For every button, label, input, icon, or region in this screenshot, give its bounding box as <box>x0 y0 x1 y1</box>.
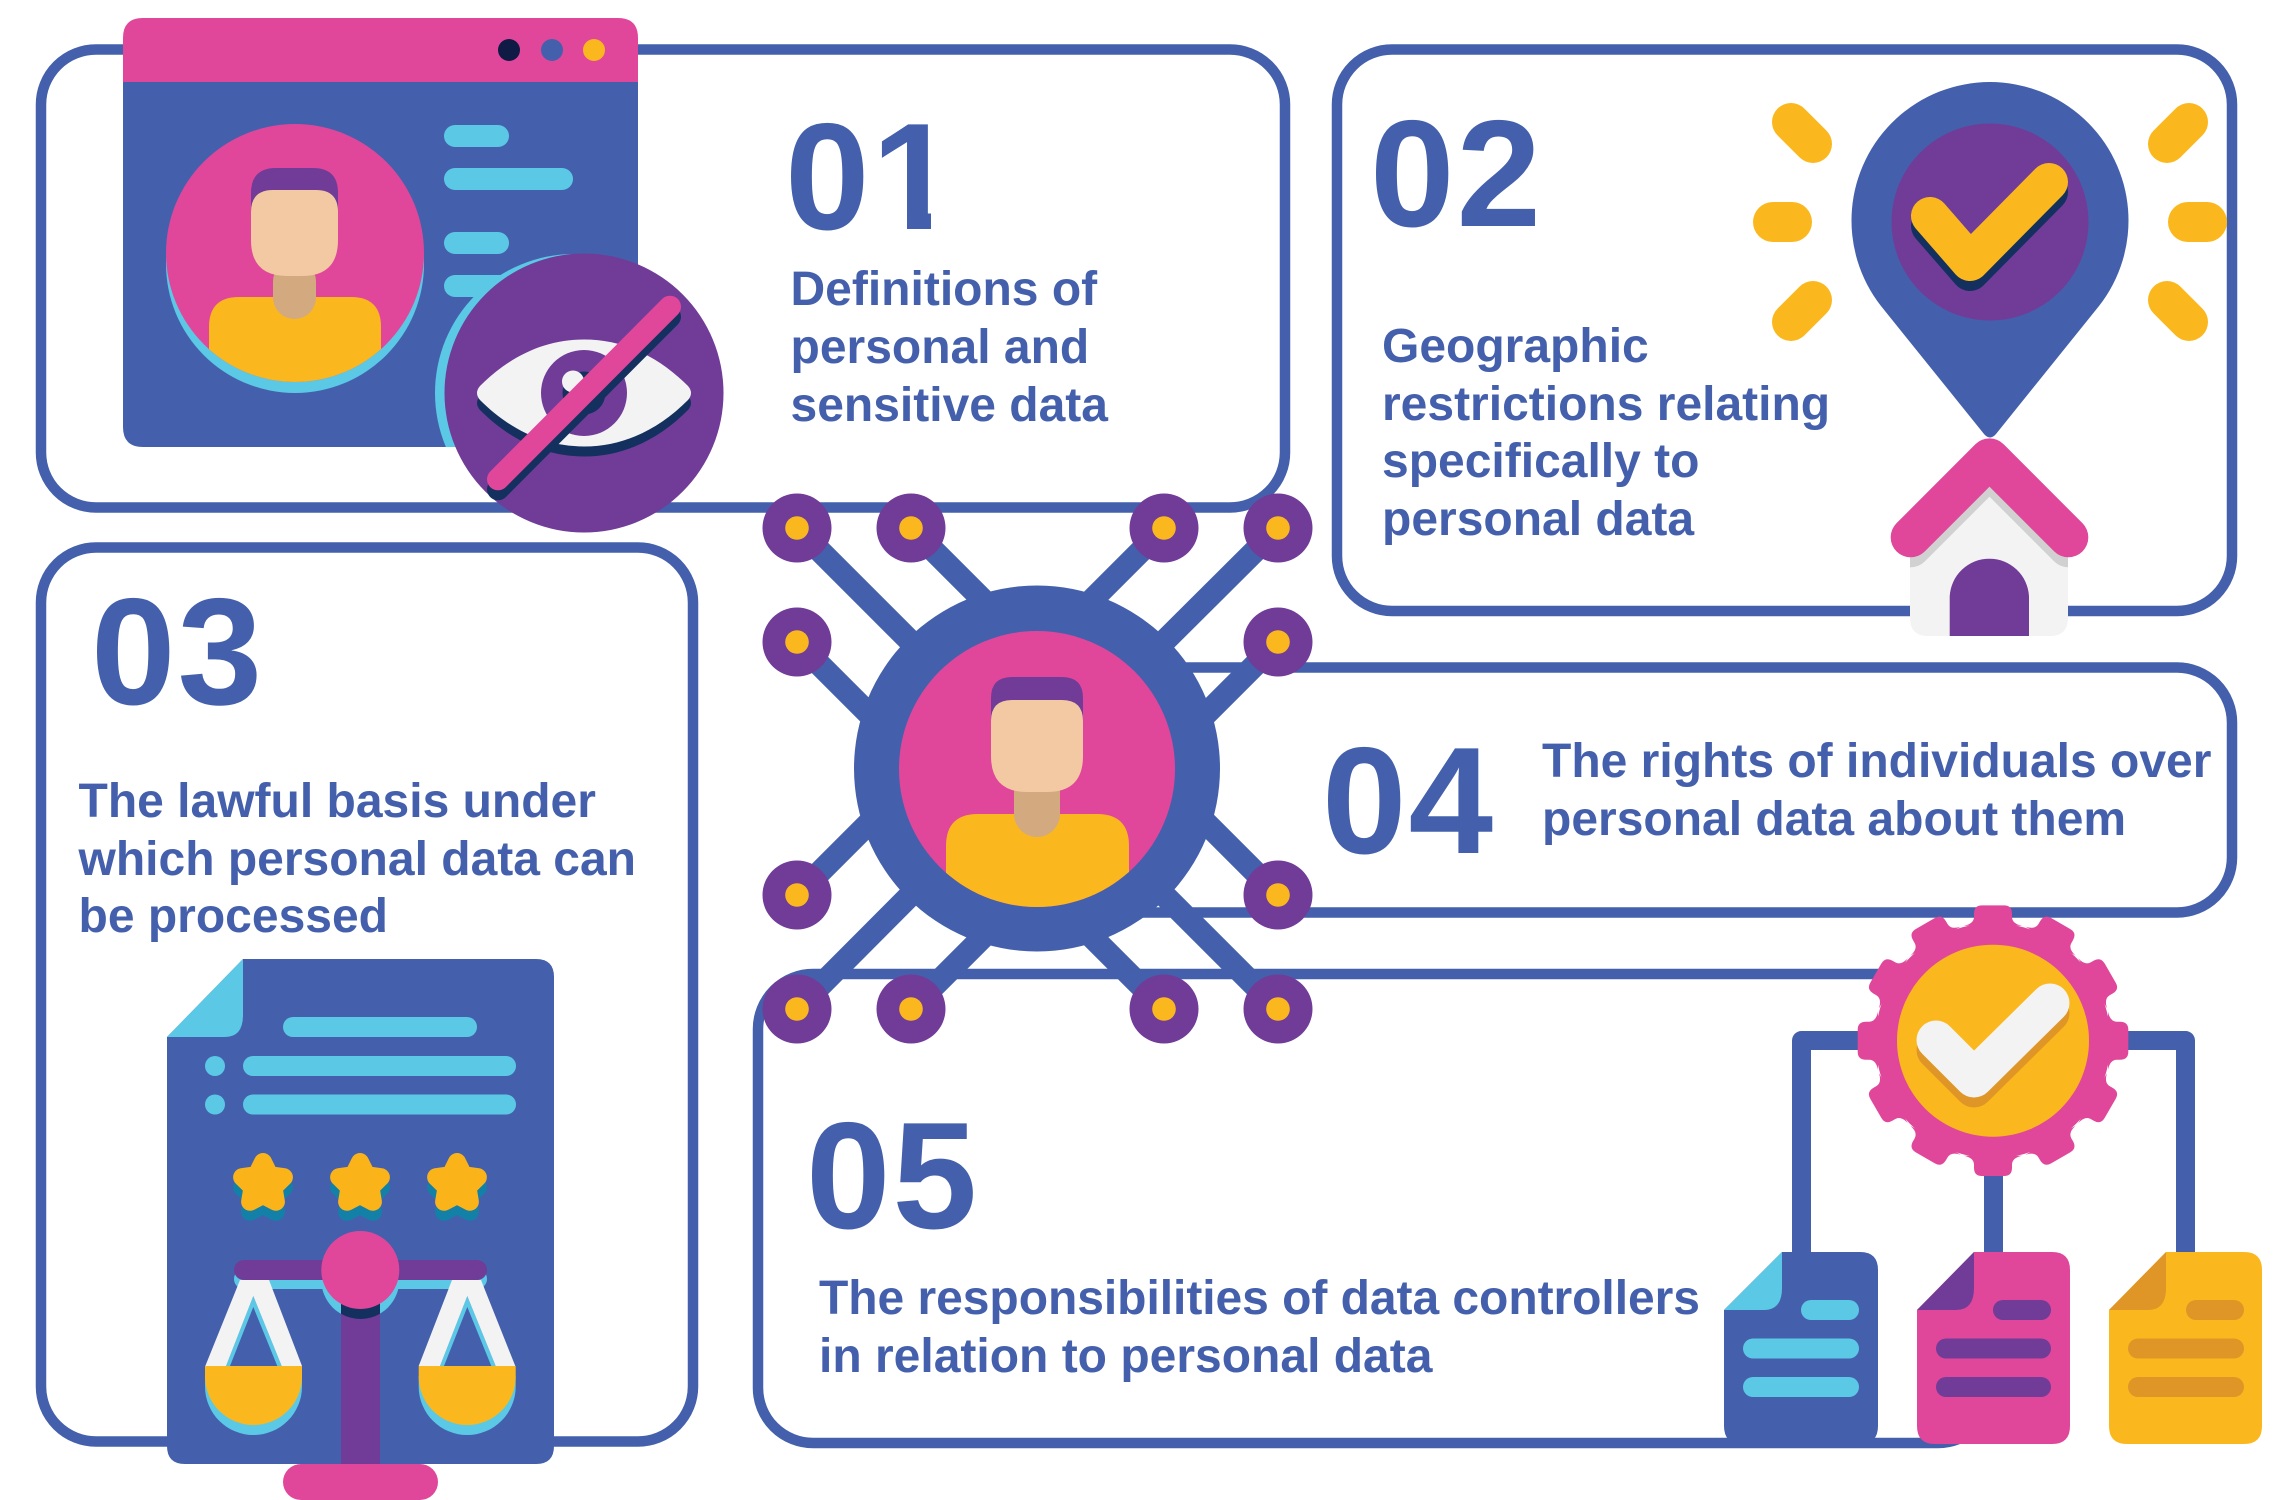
hub connectors <box>797 528 1278 1009</box>
hub disc <box>854 586 1220 952</box>
number 04: 04 <box>1322 716 1495 886</box>
document fold <box>167 959 243 1037</box>
icon: blue document <box>1724 1252 1878 1444</box>
icon: document with scales <box>167 959 554 1500</box>
panel 5 border <box>758 974 1993 1443</box>
panel 4 border <box>1100 668 2232 912</box>
text: panel 2: personal data <box>1382 493 1694 546</box>
number 05: 05 <box>806 1091 979 1261</box>
window body <box>123 82 638 447</box>
icon: house <box>1910 458 2068 636</box>
icon: gear with check <box>1858 905 2128 1176</box>
icon: browser window with profile <box>123 18 638 447</box>
central network hub <box>762 494 1312 1044</box>
text: panel 3: which personal data can <box>78 833 636 886</box>
text: panel 5: in relation to personal data <box>819 1330 1433 1383</box>
number 02: 02 <box>1370 89 1543 259</box>
panel 2 border <box>1337 50 2232 611</box>
icon: crossed-out eye <box>435 254 724 532</box>
profile avatar <box>166 124 424 400</box>
text: panel 2: restrictions relating <box>1382 378 1830 431</box>
text: panel 4 <box>1542 735 2211 846</box>
rating stars <box>242 1162 478 1212</box>
text: panel 1: sensitive data <box>790 379 1108 432</box>
icon: map pin with check <box>1851 82 2128 438</box>
panel 3 border <box>41 548 693 1442</box>
text: panel 3: The lawful basis under <box>78 775 596 828</box>
profile text lines <box>444 125 573 297</box>
text: panel 4: personal data about them <box>1542 793 2126 846</box>
icon: yellow document <box>2109 1252 2262 1444</box>
hub nodes <box>762 494 1312 1044</box>
panel 1 border <box>41 50 1285 508</box>
text: panel 5: The responsibilities of data controllers <box>819 1272 1700 1325</box>
text: panel 2: specifically to <box>1382 435 1699 488</box>
scales <box>205 1231 516 1500</box>
document connectors <box>1802 1040 2186 1260</box>
icon: rays around map pin <box>1773 122 2207 322</box>
document lines <box>205 1017 516 1114</box>
number 01: 01 <box>785 92 958 262</box>
text: panel 2: Geographic <box>1382 320 1649 373</box>
text: panel 5 <box>819 1272 1700 1383</box>
text: panel 1: personal and <box>790 321 1089 374</box>
text: panel 3: be processed <box>78 890 388 943</box>
hub node centres <box>785 516 1290 1021</box>
text: panel 1: Definitions of <box>790 263 1098 316</box>
text: panel 2 <box>1382 320 1830 546</box>
text: panel 1 <box>790 263 1108 432</box>
icon: pink document <box>1917 1252 2070 1444</box>
hub avatar <box>899 631 1175 920</box>
document sheet <box>167 959 554 1464</box>
text: panel 4: The rights of individuals over <box>1542 735 2211 788</box>
text: panel 3 <box>78 775 636 943</box>
number 03: 03 <box>91 567 264 737</box>
window title bar <box>123 18 638 82</box>
window buttons <box>498 39 605 61</box>
